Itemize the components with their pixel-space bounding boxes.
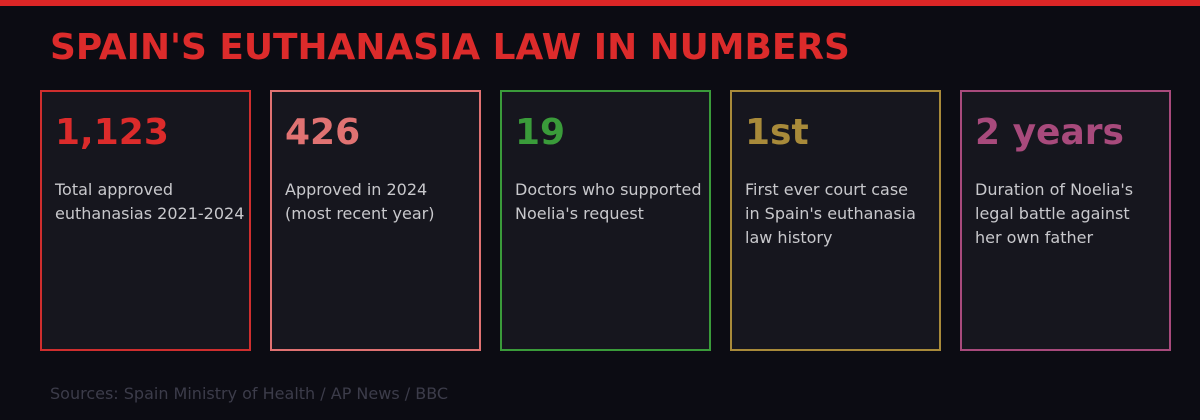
text: doctors (515, 180, 702, 223)
text: legal battle (975, 180, 1133, 247)
text: 2024: Approved in 2024 (285, 180, 427, 199)
number: 19: 19 (515, 112, 565, 153)
number: 1,123: 1,123 (55, 112, 169, 153)
panel: 2024 (270, 90, 481, 351)
text: first court case: in Spain's euthanasia (745, 204, 916, 223)
panel: first court case (730, 90, 941, 351)
text: legal battle: her own father (975, 228, 1093, 247)
title: SPAIN'S EUTHANASIA LAW IN NUMBERS (50, 27, 850, 68)
number: 2 years: 2 years (975, 112, 1124, 153)
sources: Sources: Spain Ministry of Health / AP News / BBC (50, 384, 448, 403)
text: first court case: law history (745, 228, 832, 247)
number: 426: 426 (285, 112, 360, 153)
text: first court case (745, 180, 916, 247)
number: 1st: 1st (745, 112, 809, 153)
text: 2024: (most recent year) (285, 204, 434, 223)
text: total approved: Total approved (55, 180, 173, 199)
text: first court case: First ever court case (745, 180, 908, 199)
text: doctors: Noelia's request (515, 204, 644, 223)
panel: doctors (500, 90, 711, 351)
panel: total approved (40, 90, 251, 351)
text: total approved (54, 180, 244, 223)
text: 2024 (285, 180, 434, 223)
text: doctors: Doctors who supported (515, 180, 702, 199)
text: legal battle: Duration of Noelia's (975, 180, 1133, 199)
text: legal battle: legal battle against (975, 204, 1130, 223)
panel: 2 years (960, 90, 1171, 351)
text: total approved: euthanasias 2021-2024 (55, 204, 244, 223)
